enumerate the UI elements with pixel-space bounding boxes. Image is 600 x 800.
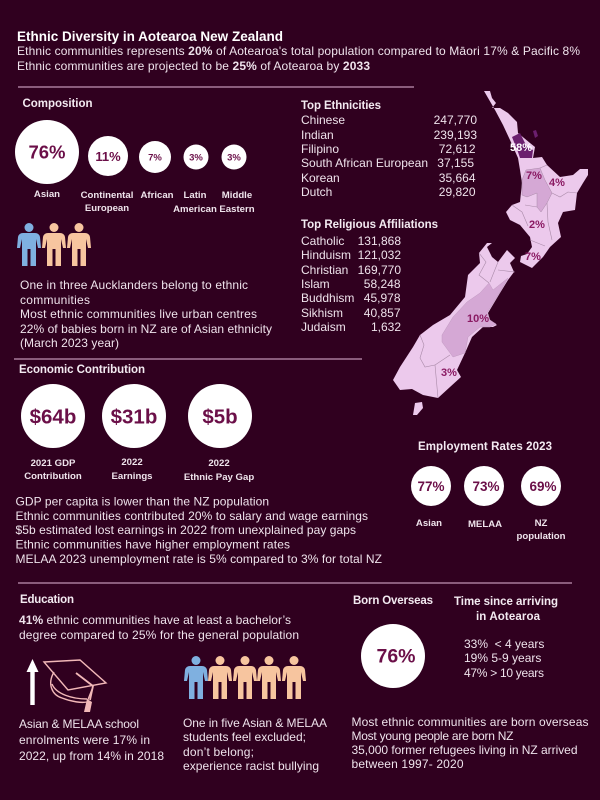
map: New Zealand regions: 4% bbox=[549, 177, 565, 189]
panel: top religious affiliations: 131,868 bbox=[358, 234, 401, 248]
title: Ethnic Diversity in Aotearoa New Zealand bbox=[17, 29, 283, 44]
chart: economic circles: 2021 GDP bbox=[31, 458, 76, 469]
panel: top ethnicities: South African European bbox=[301, 156, 428, 170]
text: born overseas facts: between 1997- 2020 bbox=[352, 757, 464, 771]
panel: top ethnicities: 29,820 bbox=[439, 185, 476, 199]
icon: up arrow bbox=[26, 659, 38, 705]
heading: composition: Composition bbox=[22, 98, 92, 110]
text: bachelor's degree statistic: 41% ethnic communities have at least a bachelor’s bbox=[19, 613, 291, 627]
text: time since arriving values: 33% < 4 years bbox=[464, 637, 544, 651]
panel: top religious affiliations: Top Religious Affiliations bbox=[301, 219, 438, 231]
text: school enrolments: Asian & MELAA school bbox=[19, 717, 139, 731]
heading: time since arriving bbox=[454, 596, 558, 623]
panel: born overseas: 76% bbox=[376, 646, 416, 668]
panel: top religious affiliations bbox=[301, 219, 438, 334]
chart: composition circles: Eastern bbox=[219, 204, 255, 215]
icon: graduation cap bbox=[44, 660, 106, 712]
chart: composition circles: Asian bbox=[34, 189, 60, 200]
map: New Zealand regions: 2% bbox=[529, 219, 545, 231]
panel: top ethnicities: 37,155 bbox=[437, 156, 474, 170]
chart: economic circles: Earnings bbox=[111, 471, 153, 482]
panel: employment rates bbox=[411, 441, 566, 542]
panel: top religious affiliations: Buddhism bbox=[301, 291, 354, 305]
heading: time since arriving: Time since arriving bbox=[454, 596, 558, 608]
chart: economic circles: 2022 bbox=[121, 457, 143, 468]
panel: top religious affiliations: 121,032 bbox=[358, 248, 401, 262]
text: student exclusion: students feel excluded; bbox=[183, 730, 306, 744]
chart: composition circles: 3% bbox=[227, 152, 241, 164]
text: student exclusion: experience racist bullying bbox=[183, 759, 319, 773]
panel: top ethnicities: Indian bbox=[301, 128, 334, 142]
panel: top ethnicities: 247,770 bbox=[434, 113, 477, 127]
icon: five people bbox=[184, 656, 306, 699]
chart: economic circles bbox=[21, 384, 254, 483]
chart: composition circles bbox=[15, 120, 255, 215]
map: New Zealand regions: 7% bbox=[525, 251, 541, 263]
text: time since arriving values bbox=[464, 637, 544, 680]
panel: employment rates: 77% bbox=[417, 479, 445, 494]
panel: education: Education bbox=[20, 594, 74, 606]
chart: composition circles: Middle bbox=[222, 190, 252, 201]
panel: top ethnicities: Chinese bbox=[301, 113, 345, 127]
text: bachelor's degree statistic: degree compared to 25% for the general population bbox=[19, 628, 299, 642]
panel: top religious affiliations: Judaism bbox=[301, 320, 346, 334]
text: student exclusion: One in five Asian & MELAA bbox=[183, 716, 327, 730]
panel: born overseas: Born Overseas bbox=[353, 595, 433, 607]
panel: employment rates: population bbox=[516, 531, 566, 542]
panel: top religious affiliations: 58,248 bbox=[364, 277, 401, 291]
map: New Zealand regions: 7% bbox=[526, 170, 542, 182]
panel: top religious affiliations: 40,857 bbox=[364, 306, 401, 320]
panel: top ethnicities: 239,193 bbox=[434, 128, 477, 142]
text: composition facts: 22% of babies born in NZ are of Asian ethnicity bbox=[20, 322, 272, 336]
text: student exclusion bbox=[183, 716, 327, 773]
South Island bbox=[393, 243, 515, 398]
panel: employment rates: MELAA bbox=[468, 519, 502, 530]
panel: top ethnicities: Korean bbox=[301, 171, 340, 185]
text: composition facts bbox=[20, 278, 272, 350]
panel: top ethnicities: Top Ethnicities bbox=[301, 100, 381, 112]
chart: economic circles: Contribution bbox=[24, 471, 82, 482]
panel: born overseas bbox=[352, 595, 588, 771]
panel: composition bbox=[15, 98, 272, 350]
North Island bbox=[484, 91, 588, 268]
text: composition facts: communities bbox=[20, 293, 90, 307]
panel: employment rates: 73% bbox=[472, 479, 500, 494]
chart: economic circles: 2022 bbox=[208, 458, 230, 469]
map: New Zealand regions bbox=[393, 91, 588, 415]
map: New Zealand regions: 10% bbox=[467, 313, 489, 325]
text: bachelor's degree statistic bbox=[19, 613, 299, 642]
title bbox=[17, 29, 580, 73]
panel: top religious affiliations: Christian bbox=[301, 263, 348, 277]
chart: composition circles: 76% bbox=[28, 142, 66, 162]
text: school enrolments: enrolments were 17% in bbox=[19, 733, 150, 747]
panel: top ethnicities: 72,612 bbox=[439, 142, 476, 156]
text: school enrolments bbox=[19, 717, 164, 763]
icon: three people bbox=[17, 223, 91, 266]
text: economic facts: Ethnic communities have higher employment rates bbox=[16, 538, 290, 552]
text: economic facts: GDP per capita is lower than the NZ population bbox=[16, 494, 269, 508]
text: school enrolments: 2022, up from 14% in 2018 bbox=[19, 749, 164, 763]
panel: employment rates: Employment Rates 2023 bbox=[418, 441, 552, 453]
text: composition facts: One in three Aucklanders belong to ethnic bbox=[20, 278, 248, 292]
panel: economic contribution bbox=[16, 364, 382, 566]
title: Ethnic communities represents 20% of Aotearoa's total population compared to Māori 17% & Pacific 8% bbox=[17, 44, 580, 58]
panel: top religious affiliations: Islam bbox=[301, 277, 330, 291]
panel: employment rates: 69% bbox=[529, 479, 557, 494]
panel: education bbox=[19, 594, 327, 773]
chart: composition circles: Latin bbox=[184, 190, 207, 201]
panel: top religious affiliations: Catholic bbox=[301, 234, 344, 248]
text: student exclusion: don’t belong; bbox=[183, 745, 254, 759]
chart: composition circles: American bbox=[173, 204, 217, 215]
text: born overseas facts bbox=[352, 715, 588, 771]
text: born overseas facts: Most ethnic communities are born overseas bbox=[352, 715, 588, 729]
text: time since arriving values: 19% 5-9 years bbox=[464, 651, 541, 665]
text: economic facts: MELAA 2023 unemployment rate is 5% compared to 3% for total NZ bbox=[16, 552, 382, 566]
chart: composition circles: Continental bbox=[81, 190, 133, 201]
text: born overseas facts: 35,000 former refugees living in NZ arrived bbox=[352, 743, 578, 757]
chart: economic circles: $31b bbox=[111, 406, 157, 428]
text: born overseas facts: Most young people are born NZ bbox=[352, 729, 514, 743]
panel: top ethnicities bbox=[301, 100, 477, 199]
panel: top religious affiliations: Hinduism bbox=[301, 248, 351, 262]
chart: composition circles: European bbox=[85, 203, 129, 214]
text: time since arriving values: 47% > 10 years bbox=[464, 666, 544, 680]
chart: economic circles: Ethnic Pay Gap bbox=[184, 472, 254, 483]
text: economic facts: $5b estimated lost earnings in 2022 from unexplained pay gaps bbox=[16, 523, 356, 537]
panel: top ethnicities: Dutch bbox=[301, 185, 332, 199]
map: New Zealand regions: 3% bbox=[441, 367, 457, 379]
panel: top religious affiliations: Sikhism bbox=[301, 306, 343, 320]
map labels: 58% bbox=[510, 142, 532, 154]
text: economic facts bbox=[16, 494, 382, 566]
chart: economic circles: $5b bbox=[202, 406, 238, 428]
panel: employment rates: Asian bbox=[416, 518, 442, 529]
text: composition facts: Most ethnic communities live urban centres bbox=[20, 307, 257, 321]
chart: composition circles: 11% bbox=[95, 149, 121, 164]
chart: economic circles: $64b bbox=[30, 406, 76, 428]
chart: composition circles: African bbox=[140, 190, 174, 201]
panel: top ethnicities: Filipino bbox=[301, 142, 339, 156]
panel: top ethnicities: 35,664 bbox=[439, 171, 476, 185]
heading: time since arriving: in Aotearoa bbox=[476, 611, 541, 623]
panel: top religious affiliations: 45,978 bbox=[364, 291, 401, 305]
chart: composition circles: 3% bbox=[189, 152, 203, 164]
chart: composition circles: 7% bbox=[148, 152, 162, 164]
panel: employment rates: NZ bbox=[535, 518, 548, 529]
title: Ethnic communities are projected to be 25% of Aotearoa by 2033 bbox=[17, 59, 370, 73]
panel: top religious affiliations: 1,632 bbox=[371, 320, 401, 334]
text: composition facts: (March 2023 year) bbox=[20, 336, 119, 350]
panel: top religious affiliations: 169,770 bbox=[358, 263, 401, 277]
panel: economic contribution: Economic Contribution bbox=[19, 364, 145, 376]
text: economic facts: Ethnic communities contributed 20% to salary and wage earnings bbox=[16, 509, 368, 523]
